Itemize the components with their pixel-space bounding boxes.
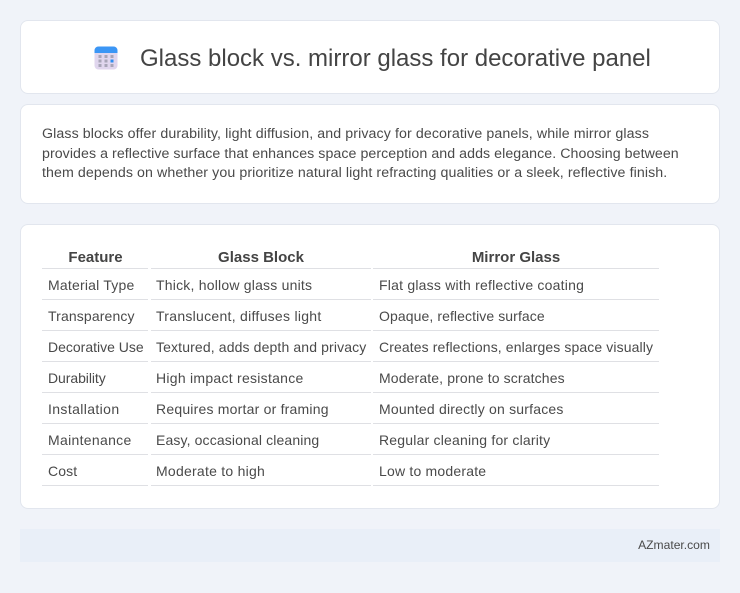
row: Installation [48,401,564,417]
icon: calendar [94,46,118,70]
footer credit: AZmater.com [638,538,710,552]
intro text: Glass blocks offer durability, light diffusion, and privacy for decorative panels, while mirror glass [42,126,649,142]
row: Durability: Durability [48,370,106,386]
header: Feature: Feature [68,249,123,266]
row: Cost: Moderate to high [156,463,265,479]
header: Mirror Glass: Mirror Glass [472,249,560,266]
header panel [20,20,720,94]
row: Installation: Mounted directly on surfaces [379,401,564,417]
header: Glass Block: Glass Block [218,249,304,266]
row: Decorative Use: Textured, adds depth and privacy [156,339,366,355]
row: Cost: Low to moderate [379,463,486,479]
intro text: provides a reflective surface that enhances space perception and adds elegance. Choosing between [42,146,679,162]
row: Material Type: Thick, hollow glass units [156,277,312,293]
row: Material Type [48,277,584,293]
row: Transparency: Translucent, diffuses light [156,308,322,324]
intro text [42,126,679,181]
row: Installation: Requires mortar or framing [156,401,329,417]
row: Decorative Use: Creates reflections, enlarges space visually [379,339,653,355]
row: Material Type: Material Type [48,277,135,293]
row: Material Type: Flat glass with reflective coating [379,277,584,293]
table panel [20,224,720,509]
row: Cost: Cost [48,463,77,479]
row: Transparency: Transparency [48,308,135,324]
row: Decorative Use: Decorative Use [48,339,144,355]
row: Durability: High impact resistance [156,370,304,386]
row: Maintenance: Easy, occasional cleaning [156,432,319,448]
footer bar [20,529,720,562]
comparison table [42,249,659,486]
row: Installation: Installation [48,401,120,417]
row: Durability: Moderate, prone to scratches [379,370,565,386]
row: Decorative Use [48,339,653,355]
row: Maintenance [48,432,550,448]
intro panel [20,104,720,204]
row: Transparency: Opaque, reflective surface [379,308,545,324]
row: Maintenance: Maintenance [48,432,132,448]
intro text: them depends on whether you prioritize natural light refracting qualities or a sleek, reflective finish. [42,165,667,181]
row: Maintenance: Regular cleaning for clarity [379,432,550,448]
row: Transparency [48,308,545,324]
row: Durability [48,370,565,386]
title: Glass block vs. mirror glass for decorative panel [140,45,651,72]
row: Cost [48,463,486,479]
